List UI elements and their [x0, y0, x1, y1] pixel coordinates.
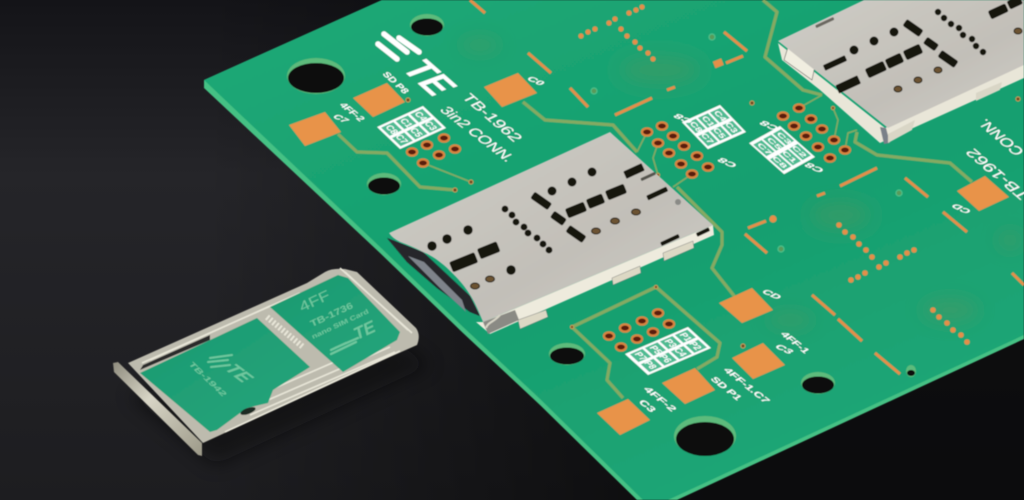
white pin tables: P3 C4	[662, 338, 689, 358]
tab loop at connector corner	[486, 315, 500, 328]
connector side wall	[778, 43, 1024, 143]
white pin tables: C1 C5	[700, 115, 728, 139]
silkscreen labels: 4FF-1	[777, 330, 812, 356]
silkscreen labels: CD	[949, 202, 975, 215]
silkscreen labels: SD P1	[707, 375, 745, 403]
white pin tables: P1 P2	[677, 331, 704, 351]
tray slot	[140, 335, 210, 370]
silkscreen labels: C8	[802, 161, 828, 174]
micro SD card: TB-1942	[186, 361, 230, 398]
nano SIM card 4FF: TE	[351, 317, 379, 344]
bronze contact holes	[470, 209, 640, 289]
orange strips and dots	[470, 0, 1024, 374]
tray body	[128, 269, 419, 443]
trace end vias	[406, 97, 1020, 348]
lower SIM connector	[387, 132, 714, 334]
upper SIM connector	[778, 0, 1024, 144]
white pin tables: C8 C7	[688, 120, 716, 145]
white pin tables: C1 C5	[398, 117, 425, 138]
white pin tables: P7 P8	[632, 351, 659, 370]
silkscreen labels: C7	[329, 113, 351, 124]
spring contacts	[518, 241, 694, 329]
plate cutouts	[427, 163, 710, 275]
small green vias	[591, 34, 902, 252]
TE logo on board: TE	[392, 55, 467, 100]
silkscreen labels: 4FF-1.C7	[720, 366, 772, 405]
connector side wall	[476, 225, 714, 334]
orange contact pads	[289, 73, 1009, 435]
copper traces	[338, 0, 972, 398]
silkscreen labels: C8	[757, 119, 783, 132]
silkscreen labels: C8	[671, 112, 697, 125]
white pin tables: C8 C7	[383, 124, 410, 145]
faint olive patches on the board	[458, 35, 1024, 330]
SIM card tray	[113, 268, 419, 456]
nano SIM card 4FF	[270, 275, 400, 372]
small grey dimple	[675, 199, 681, 205]
bronze contact holes	[894, 28, 1022, 92]
connector inner recess	[387, 238, 480, 316]
white pin tables: C3 C2	[774, 131, 808, 159]
silkscreen labels: 3in2 CONN.	[435, 105, 519, 164]
shadow under tray	[130, 345, 430, 465]
connector top plate	[778, 0, 1024, 128]
mounting holes	[287, 14, 916, 456]
nano SIM card 4FF: nano SIM Card	[311, 308, 370, 341]
perforated strip between card seats	[267, 317, 303, 347]
connector top plate	[389, 132, 713, 322]
white pin tables: C4 C3	[712, 110, 740, 134]
via clusters	[407, 104, 850, 351]
micro SD card: TE	[220, 361, 257, 386]
nano SIM card 4FF: TB-1736	[309, 300, 355, 329]
white pin tables: P5 P6	[647, 344, 674, 364]
silkscreen labels: TB-1962	[457, 92, 526, 144]
tray front bar	[113, 362, 202, 456]
silkscreen labels: SD P8	[379, 70, 411, 95]
silkscreen labels: C3	[771, 343, 796, 355]
silkscreen labels: 4FF-2	[336, 101, 367, 123]
silkscreen labels: C8	[715, 156, 741, 169]
white pin tables: C4 C3	[412, 110, 439, 132]
silkscreen labels	[329, 34, 1024, 414]
white pin tables: C5 C1	[765, 137, 798, 164]
micro SD card	[140, 318, 310, 432]
silkscreen labels: C0	[523, 75, 547, 87]
TE logo on board	[378, 34, 467, 100]
white pin tables	[377, 105, 815, 375]
silkscreen labels: CD	[758, 288, 784, 301]
tray ridges	[142, 268, 412, 432]
silkscreen labels: C3	[635, 398, 658, 414]
white pin tables: C7 C8	[755, 142, 789, 170]
plate cutouts	[815, 0, 1023, 94]
silkscreen labels: 4FF-2	[640, 385, 679, 413]
nano SIM card 4FF: 4FF	[297, 287, 332, 315]
